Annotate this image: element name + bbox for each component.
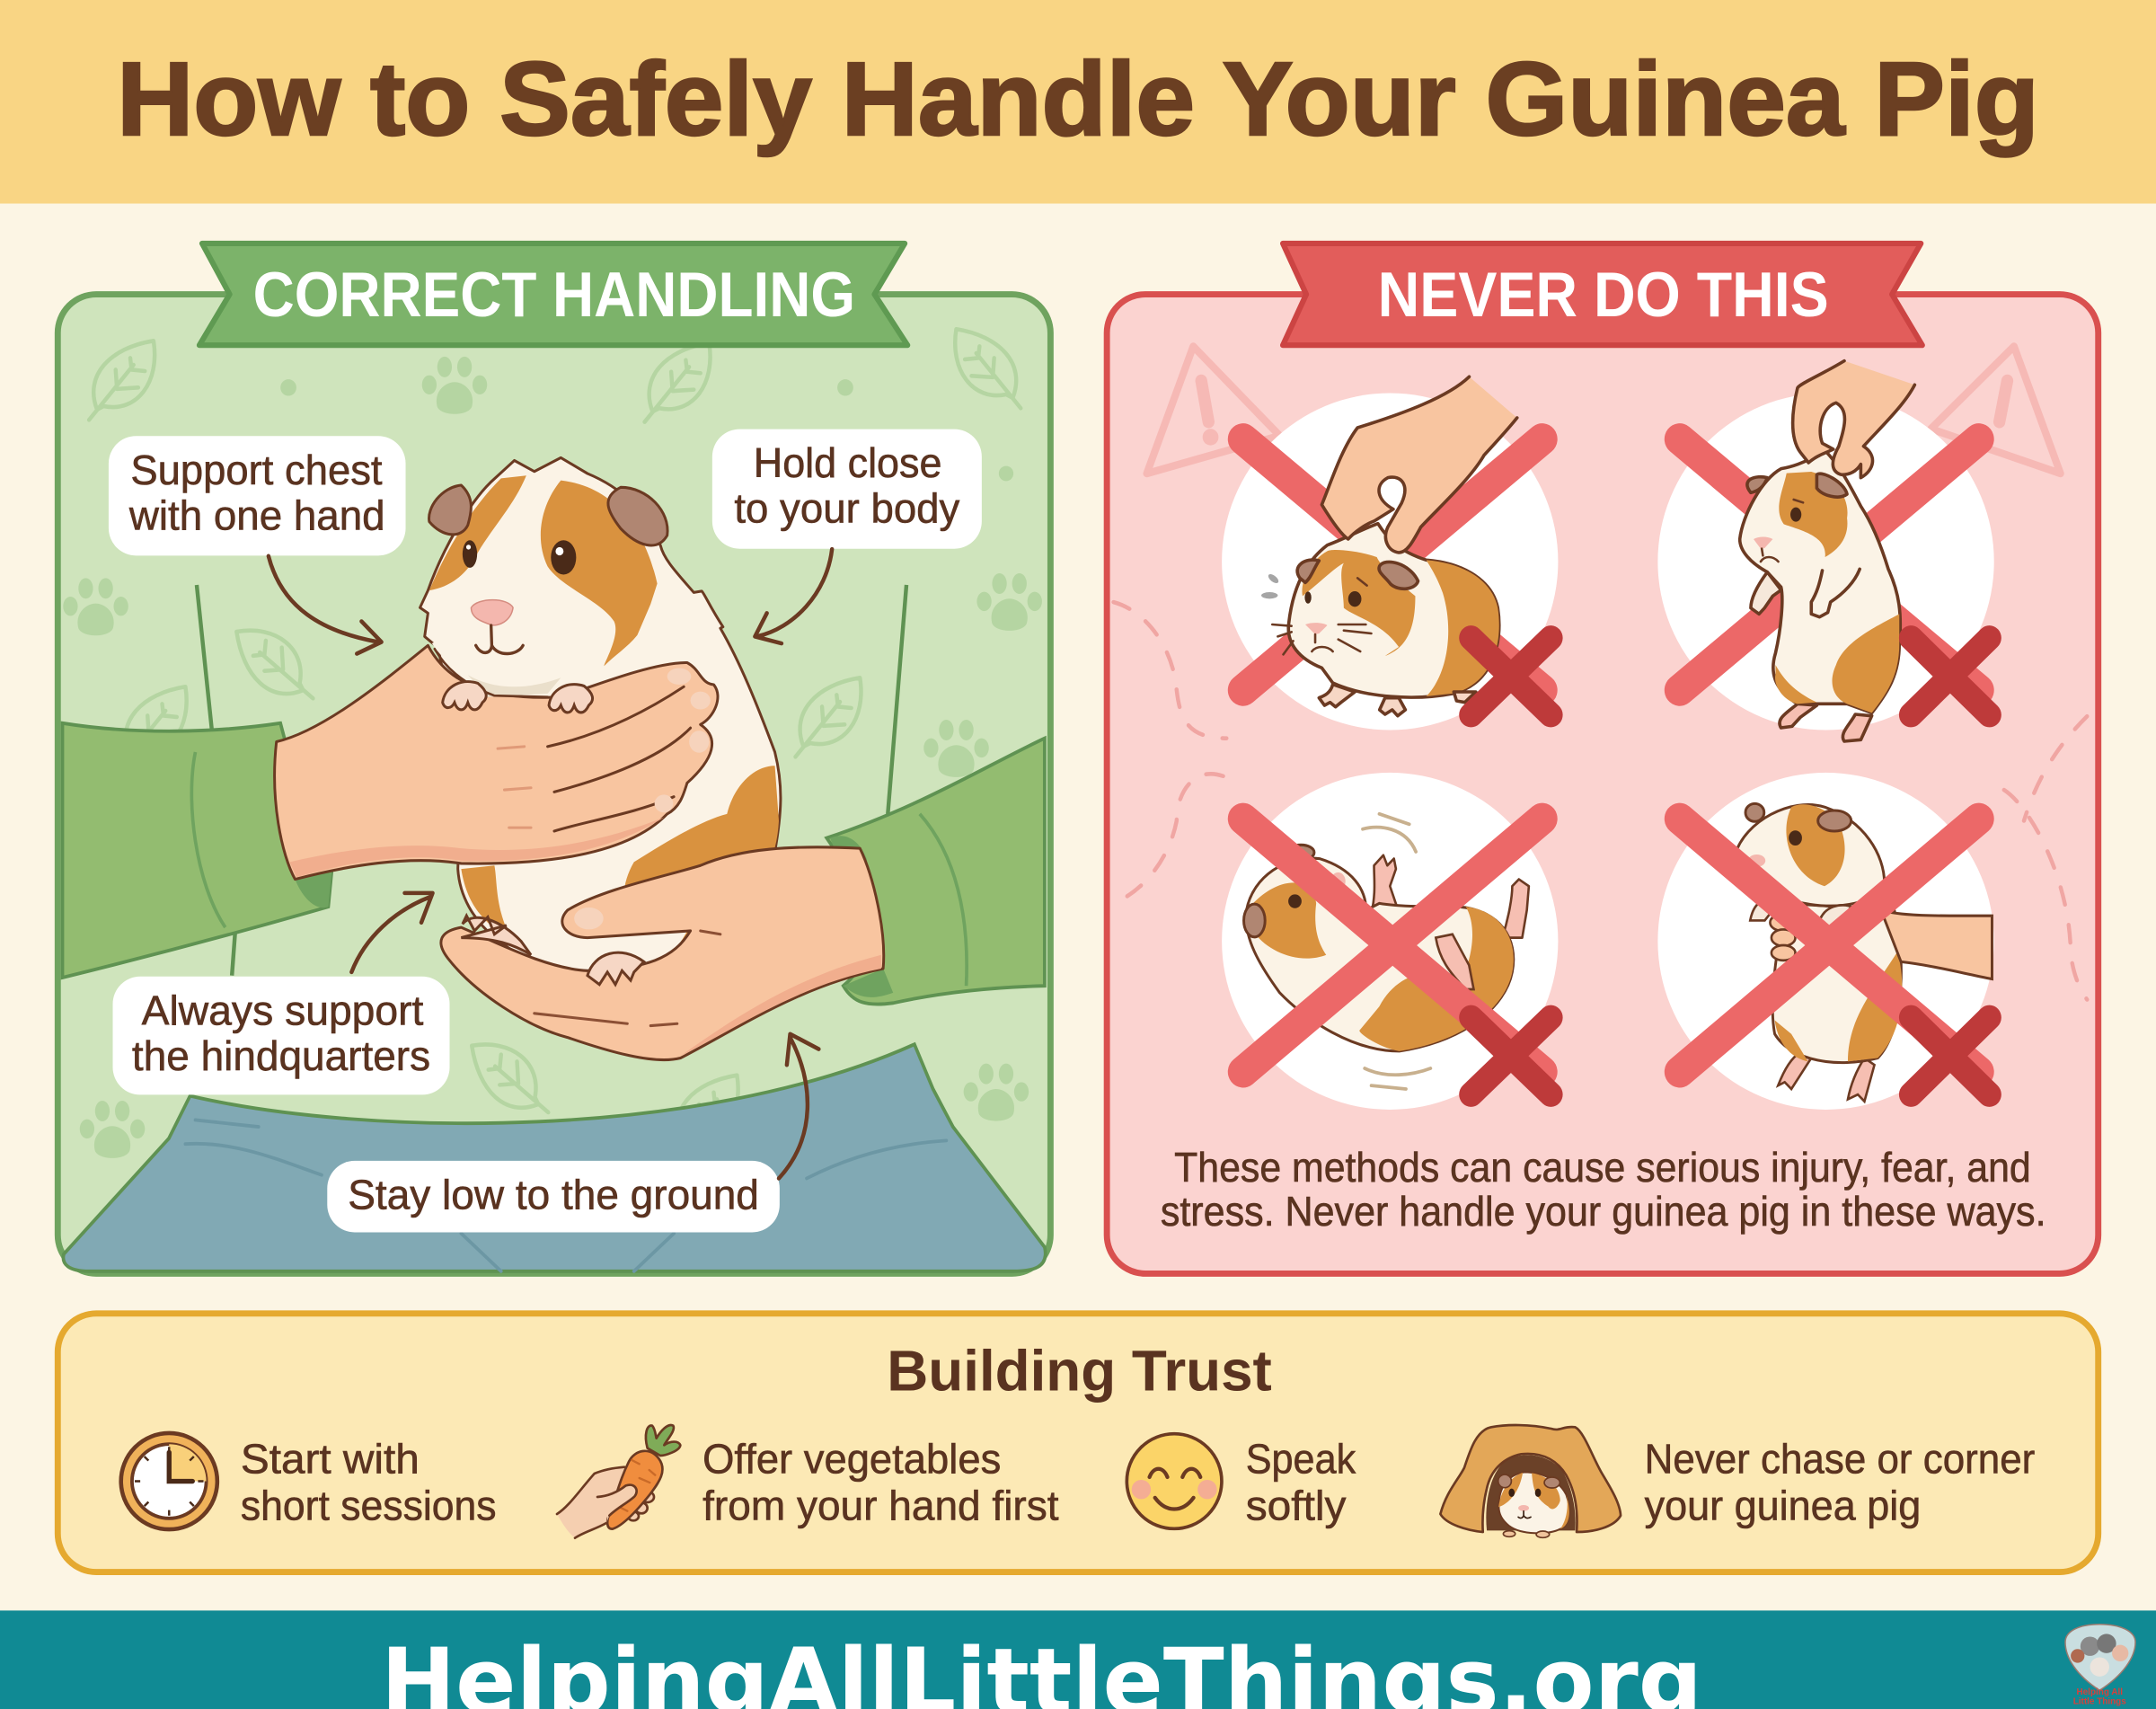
icon: guinea pig in hideout — [1440, 1425, 1621, 1537]
callout: always support: Always support — [142, 987, 424, 1033]
callout: support chest — [109, 436, 406, 555]
right sleeve — [826, 739, 1045, 1005]
jeans — [63, 1044, 1046, 1271]
guinea pig — [420, 457, 781, 972]
footer logo: Little Things — [2073, 1696, 2126, 1706]
callout: hold close: to your body — [734, 485, 959, 532]
footer logo — [2065, 1625, 2135, 1706]
panel: correct handling — [57, 244, 1050, 1273]
text: speak softly: Speak — [1246, 1435, 1356, 1482]
title: How to Safely Handle Your Guinea Pig — [117, 40, 2039, 157]
callout: always support: the hindquarters — [132, 1032, 430, 1079]
text: offer vegetables — [702, 1435, 1059, 1528]
text: never chase: your guinea pig — [1645, 1482, 1921, 1528]
warning text: stress. Never handle your guinea pig in these ways. — [1161, 1188, 2046, 1235]
callout: hold close: Hold close — [754, 439, 941, 486]
faded warning triangles and dashed trails — [1114, 346, 2087, 999]
illustration: hands holding guinea pig — [63, 329, 1046, 1271]
text: offer vegetables: from your hand first — [702, 1482, 1059, 1528]
callout: always support — [113, 977, 450, 1094]
text: speak softly: softly — [1246, 1482, 1347, 1528]
cell: held by the chest with one hand — [1657, 773, 1994, 1110]
cell: lifting by the scruff — [1657, 361, 1994, 741]
cell: grabbing scruff from above — [1222, 376, 1558, 730]
icon: hand offering carrot — [557, 1425, 680, 1538]
warning text — [1161, 1144, 2046, 1235]
panel: never do this — [1107, 244, 2099, 1273]
cell: guinea pig on its back — [1222, 773, 1558, 1110]
heading: building trust: Building Trust — [887, 1338, 1272, 1403]
banner: correct handling — [199, 244, 907, 345]
left sleeve — [63, 723, 331, 978]
callout: support chest: Support chest — [130, 447, 383, 493]
text: speak softly — [1246, 1435, 1356, 1528]
callout: hold close — [712, 429, 982, 549]
text: offer vegetables: Offer vegetables — [702, 1435, 1001, 1482]
banner label: NEVER DO THIS — [1378, 259, 1829, 330]
text: short sessions: short sessions — [241, 1482, 497, 1528]
callout: stay low — [327, 1161, 780, 1232]
text: short sessions: Start with — [241, 1435, 420, 1482]
footer band — [0, 1610, 2156, 1709]
banner: never do this — [1283, 244, 1922, 345]
icon: smiley — [1127, 1434, 1222, 1528]
text: short sessions — [241, 1435, 497, 1528]
text: never chase — [1645, 1435, 2035, 1528]
text: never chase: Never chase or corner — [1645, 1435, 2035, 1482]
callout: support chest: with one hand — [128, 491, 385, 538]
icon: clock — [121, 1433, 217, 1529]
arrows — [269, 549, 832, 1178]
lower hand — [441, 847, 884, 1060]
panel: building trust — [57, 1314, 2099, 1572]
callout: stay low: Stay low to the ground — [348, 1171, 759, 1218]
header band — [0, 0, 2156, 204]
footer logo: Helping All — [2076, 1687, 2123, 1697]
upper hand — [275, 645, 718, 880]
warning text: These methods can cause serious injury, fear, and — [1174, 1144, 2031, 1191]
banner label: CORRECT HANDLING — [253, 259, 855, 330]
